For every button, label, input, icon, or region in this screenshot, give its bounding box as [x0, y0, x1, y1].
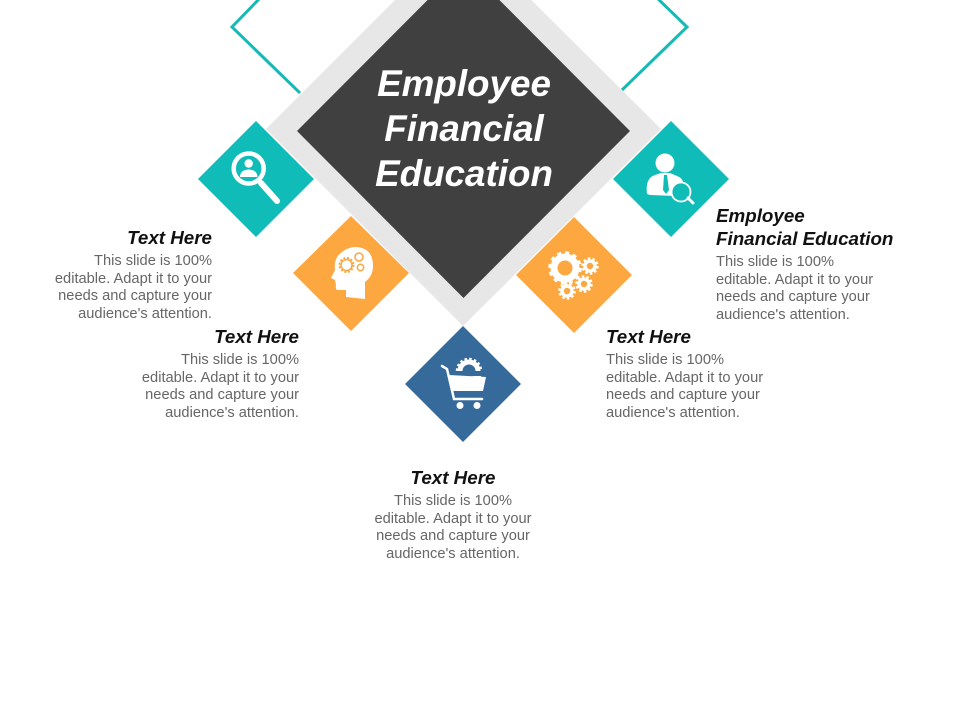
text block: left lower: Text Here: [214, 326, 299, 347]
icon: employee with magnifier on teal diamond: [613, 121, 729, 237]
title: Education: [375, 153, 553, 194]
text block: left upper: Text Here: [127, 227, 212, 248]
title: Employee: [377, 63, 551, 104]
text block: right upper: needs and capture your: [716, 289, 870, 305]
text block: right lower: Text Here: [606, 326, 691, 347]
icon: three gears on orange diamond: [516, 217, 632, 333]
text block: left upper: audience's attention.: [78, 306, 212, 322]
text block: left lower: This slide is 100%: [181, 352, 299, 368]
text block: bottom center: editable. Adapt it to your: [374, 511, 532, 527]
text block: bottom center: needs and capture your: [376, 528, 530, 544]
dark central diamond: [297, 0, 630, 298]
icon: magnifier with person on teal diamond: [198, 121, 314, 237]
text block: right lower: audience's attention.: [606, 405, 740, 421]
text block: left lower: [142, 326, 299, 421]
text block: right upper: Employee: [716, 205, 805, 226]
text block: right lower: editable. Adapt it to your: [606, 370, 763, 386]
text block: right lower: needs and capture your: [606, 387, 760, 403]
text block: bottom center: [374, 467, 532, 562]
text block: left lower: audience's attention.: [165, 405, 299, 421]
title: [375, 63, 553, 194]
text block: right upper: audience's attention.: [716, 307, 850, 323]
text block: bottom center: This slide is 100%: [394, 493, 512, 509]
text block: right lower: [606, 326, 763, 421]
text block: left upper: needs and capture your: [58, 288, 212, 304]
text block: right upper: [716, 205, 893, 323]
text block: left upper: This slide is 100%: [94, 253, 212, 269]
text block: left upper: editable. Adapt it to your: [55, 271, 212, 287]
text block: bottom center: Text Here: [411, 467, 495, 488]
text block: left upper: [55, 227, 212, 322]
text block: bottom center: audience's attention.: [386, 546, 520, 562]
teal outline diamond: [232, 0, 687, 93]
text block: left lower: needs and capture your: [145, 387, 299, 403]
text block: right upper: This slide is 100%: [716, 254, 834, 270]
text block: right lower: This slide is 100%: [606, 352, 724, 368]
title: Financial: [384, 108, 544, 149]
text block: left lower: editable. Adapt it to your: [142, 370, 299, 386]
light gray diamond: [266, 0, 661, 326]
icon: head with gears on orange diamond: [293, 216, 409, 331]
text block: right upper: Financial Education: [716, 228, 893, 249]
text block: right upper: editable. Adapt it to your: [716, 272, 873, 288]
icon: shopping cart with gear on blue diamond: [405, 326, 521, 442]
